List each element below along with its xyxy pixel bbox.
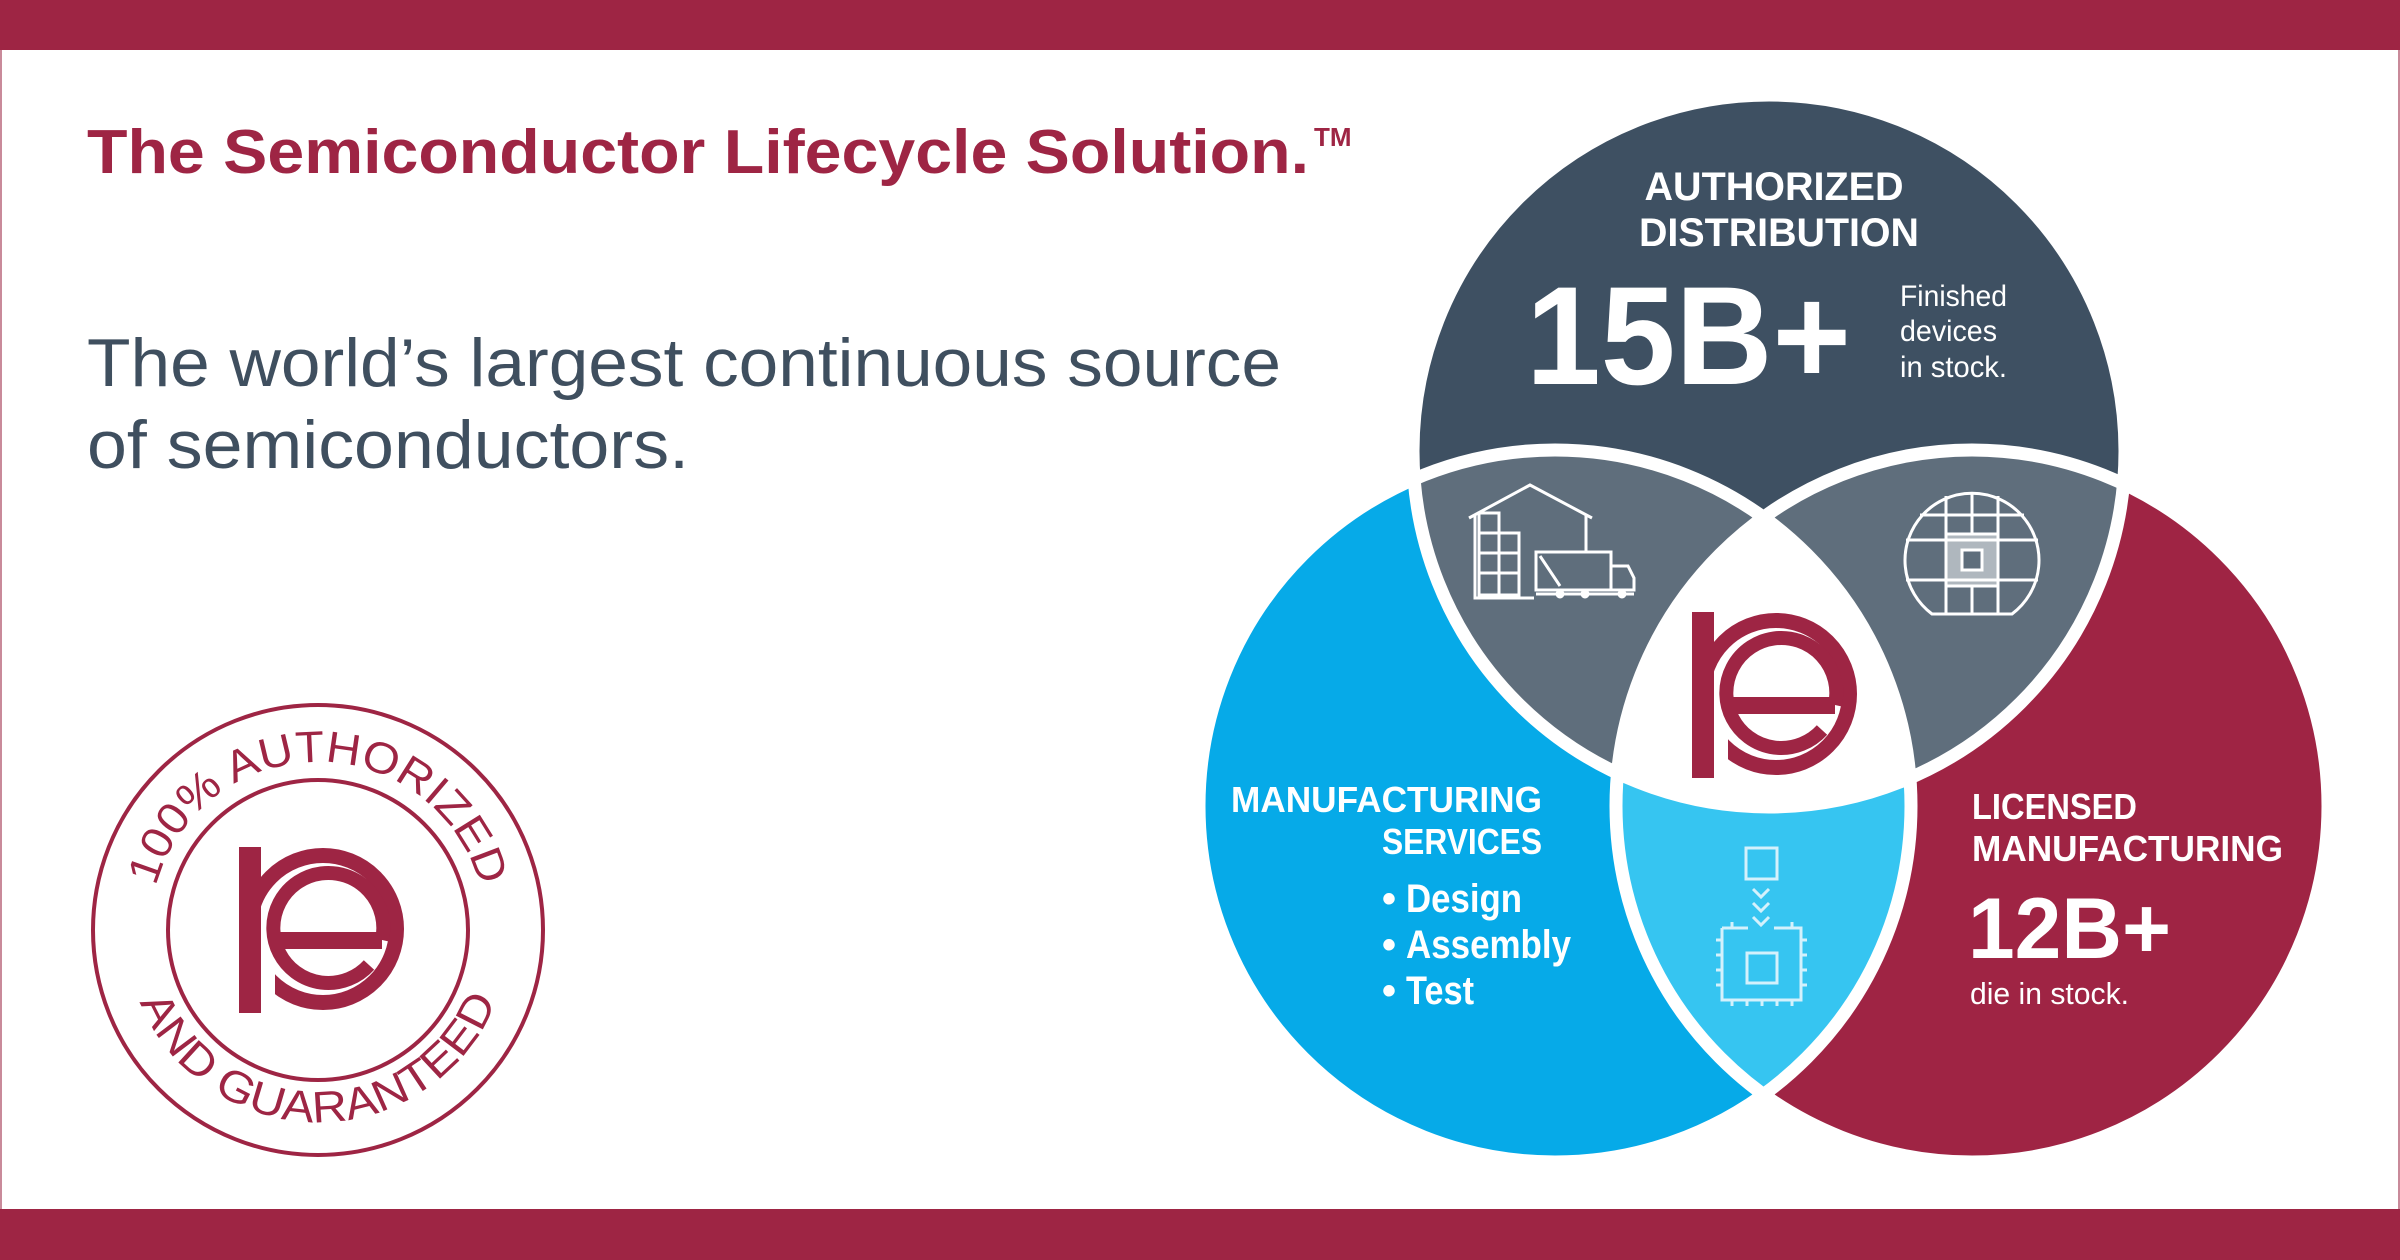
circle: manufacturing services [1199,450,1911,1162]
text: manufacturing services: Design [1406,877,1522,921]
top bar [0,0,2400,50]
text: licensed manufacturing: LICENSED [1972,786,2137,827]
text: licensed manufacturing: MANUFACTURING [1972,828,2283,869]
center [1624,526,1903,800]
subtitle: of semiconductors. [87,407,689,483]
title: TM [1314,122,1352,152]
icon: warehouse and truck [1469,485,1634,598]
stamp: 100% authorized and guaranteed: 100% AUTHORIZED [130,731,504,883]
text: manufacturing services: Test [1406,969,1474,1013]
text: manufacturing services: SERVICES [1382,821,1542,862]
subtitle [87,325,1281,483]
venn diagram [1199,95,2328,1162]
bottom bar [0,1209,2400,1260]
center logo [1692,612,1850,778]
circle: authorized distribution [1413,95,2125,807]
subtitle: The world’s largest continuous source [87,325,1281,401]
text: authorized distribution: devices [1900,315,1997,348]
stamp: 100% authorized and guaranteed: AND GUARANTEED [140,994,491,1123]
text: licensed manufacturing: 12B+ [1968,881,2171,977]
text: licensed manufacturing: die in stock. [1970,976,2129,1011]
text: manufacturing services: Assembly [1406,923,1572,967]
text: authorized distribution: DISTRIBUTION [1639,211,1919,255]
text: manufacturing services [1231,779,1572,1013]
intersection bottom [1622,782,1904,1086]
intersection top-left [1421,456,1752,764]
text: authorized distribution: AUTHORIZED [1644,165,1904,209]
text: authorized distribution: in stock. [1900,351,2007,384]
text: authorized distribution [1526,165,2007,414]
icon: wafer [1905,492,2039,614]
text: licensed manufacturing [1968,786,2283,1011]
text: manufacturing services: MANUFACTURING [1231,779,1542,820]
circle: licensed manufacturing [1616,450,2328,1162]
title: The Semiconductor Lifecycle Solution. [87,118,1309,187]
text: authorized distribution: Finished [1900,280,2007,313]
text: manufacturing services: • [1382,877,1396,921]
stamp logo [239,847,396,1013]
icon: die to chip [1716,848,1807,1006]
text: manufacturing services: • [1382,923,1396,967]
text: authorized distribution: 15B+ [1526,257,1851,414]
text: manufacturing services: • [1382,969,1396,1013]
intersection top-right [1774,456,2116,768]
stamp: 100% authorized and guaranteed [91,703,545,1157]
